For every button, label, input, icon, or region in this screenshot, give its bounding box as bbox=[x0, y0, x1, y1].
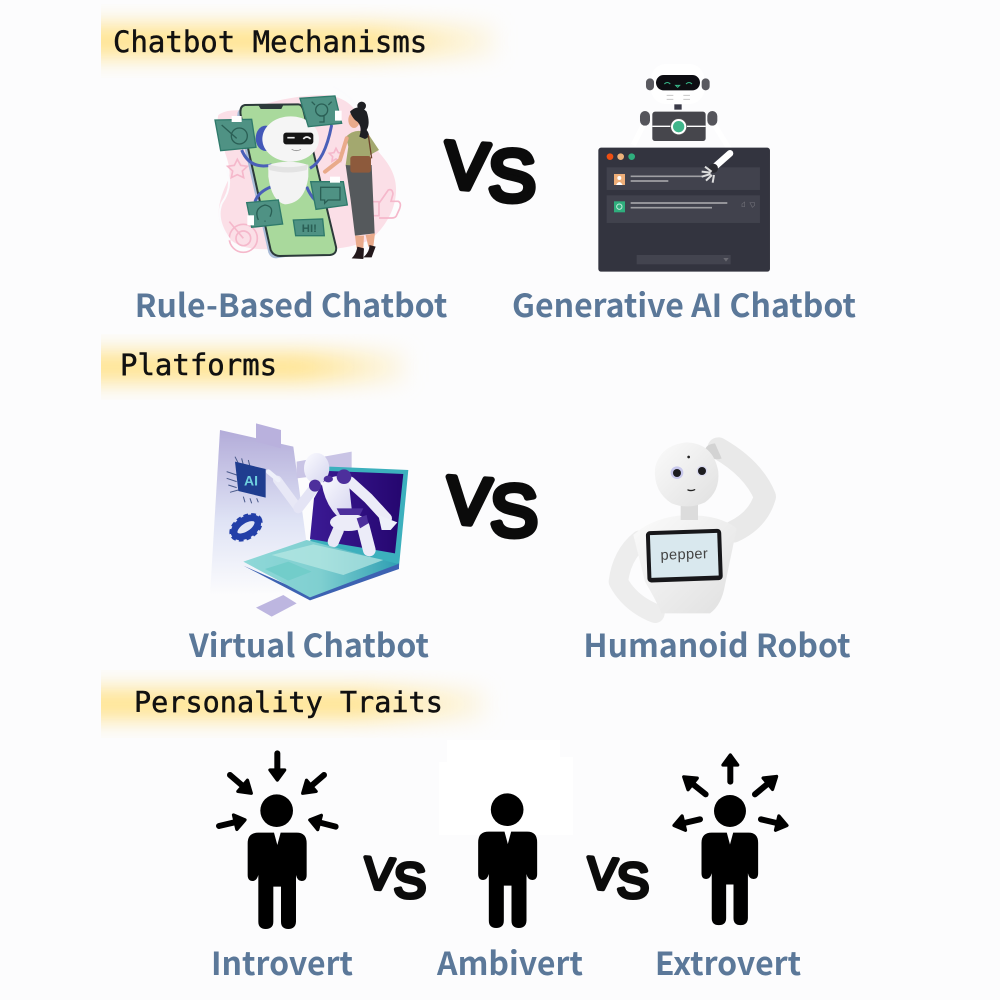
VS mark: chatbot mechanisms: VS bbox=[442, 127, 536, 217]
robot body and head bbox=[268, 162, 308, 204]
cards: gear, lightbulb, question, chat bbox=[215, 96, 347, 236]
icon: introvert person with inward arrows bbox=[217, 753, 337, 929]
chat window bbox=[598, 148, 770, 272]
woman figure bbox=[346, 165, 375, 236]
VS mark: introvert vs ambivert: VS bbox=[362, 847, 426, 909]
hologram panels bbox=[210, 430, 313, 595]
arrows pointing out bbox=[672, 755, 789, 833]
AI chip bbox=[227, 457, 258, 503]
handbag bbox=[350, 156, 371, 173]
input box bbox=[637, 255, 731, 264]
tablet on chest bbox=[646, 529, 723, 583]
icon: ambivert person bbox=[478, 793, 537, 928]
heading: Chatbot Mechanisms bbox=[101, 10, 498, 72]
robot figure bbox=[268, 472, 387, 550]
label: Virtual Chatbot: Virtual Chatbot bbox=[189, 621, 429, 667]
decorations: star, thumb and target bbox=[220, 87, 400, 252]
icon: extrovert person with outward arrows bbox=[672, 755, 789, 925]
illustration: generative AI chatbot bbox=[598, 64, 770, 272]
tablet on chest: pepper bbox=[660, 546, 708, 564]
arms bbox=[718, 448, 765, 532]
VS mark: ambivert vs extrovert: VS bbox=[585, 847, 649, 909]
heading: Personality Traits bbox=[101, 674, 488, 734]
binder clips on cards bbox=[232, 111, 342, 225]
heading: Personality Traits: Personality Traits bbox=[134, 686, 443, 719]
label: Generative AI Chatbot: Generative AI Chatbot bbox=[512, 281, 856, 327]
head bbox=[655, 442, 718, 506]
pink blob background bbox=[218, 95, 396, 249]
panel: ambivert white backing bbox=[439, 740, 573, 835]
text on card: HI!: HI! bbox=[302, 223, 317, 235]
robot arms bbox=[242, 125, 332, 202]
user message row bbox=[607, 167, 760, 190]
photo: Pepper humanoid robot bbox=[618, 442, 765, 613]
bot message row bbox=[607, 195, 760, 223]
label: Humanoid Robot: Humanoid Robot bbox=[583, 621, 851, 667]
VS mark: platforms: VS bbox=[444, 462, 538, 552]
illustration: rule-based chatbot bbox=[215, 87, 400, 259]
robot torso bbox=[633, 115, 730, 150]
label: Rule-Based Chatbot: Rule-Based Chatbot bbox=[135, 281, 447, 327]
gear icon bbox=[226, 509, 266, 545]
laptop screen bbox=[310, 467, 408, 567]
person bbox=[248, 794, 307, 929]
robot head bbox=[651, 64, 704, 104]
torso bbox=[633, 515, 737, 613]
heading: Chatbot Mechanisms: Chatbot Mechanisms bbox=[113, 25, 427, 59]
arrows pointing in bbox=[217, 753, 337, 834]
robot hand bbox=[715, 153, 730, 167]
illustration: virtual chatbot bbox=[210, 423, 408, 617]
heading: Platforms bbox=[101, 337, 408, 397]
person bbox=[702, 795, 758, 925]
laptop base bbox=[243, 563, 399, 600]
illustration: virtual chatbot: AI bbox=[244, 473, 258, 489]
label: Introvert: Introvert bbox=[211, 939, 353, 985]
smartphone bbox=[237, 108, 333, 258]
label: Ambivert: Ambivert bbox=[437, 939, 583, 985]
label: Extrovert: Extrovert bbox=[655, 939, 801, 985]
heading: Platforms: Platforms bbox=[120, 348, 277, 382]
